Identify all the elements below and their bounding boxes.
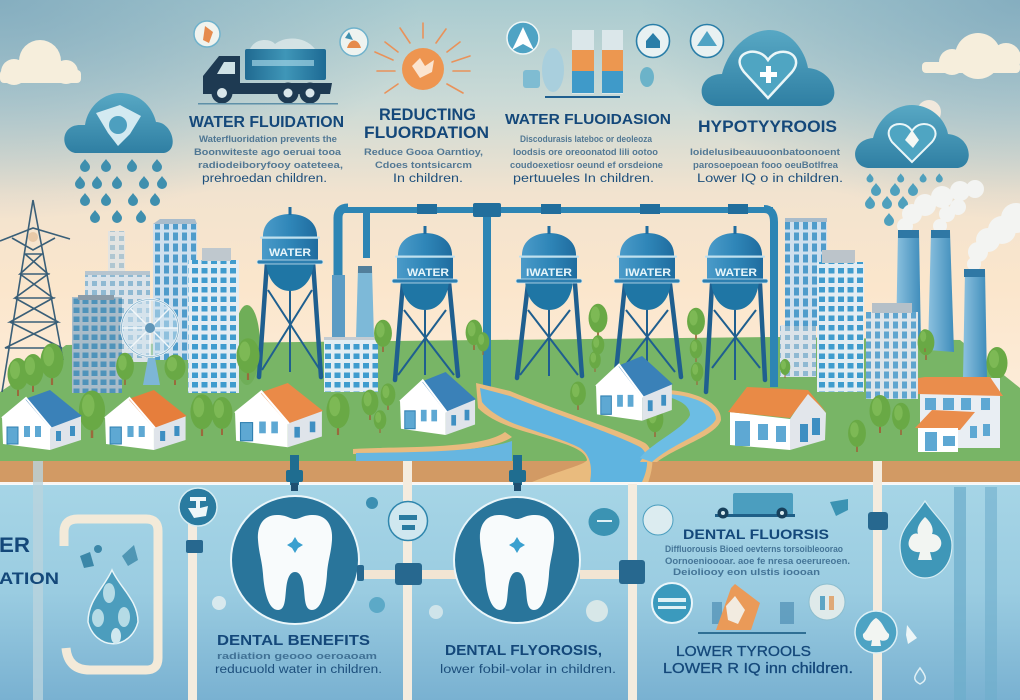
pipe network — [332, 203, 774, 395]
cloud: top left cream — [0, 40, 81, 85]
left distant tower — [108, 231, 125, 271]
text block: reducting fluordation: Reduce Gooa Oarntioy, — [364, 147, 483, 157]
small tanker truck icon — [643, 493, 848, 535]
sky background — [0, 0, 1020, 462]
left grey building — [72, 295, 122, 393]
cloud: blue with rain left — [64, 93, 173, 223]
icon: sun with rays — [375, 23, 470, 93]
text block: water fluoidasion: Discodurasis lateboc or deoleoza — [520, 134, 653, 144]
house 1 blue roof — [2, 390, 82, 450]
right grey-white building — [866, 303, 918, 399]
icon: water drop — [88, 570, 138, 644]
water tower 4: IWATER — [625, 267, 671, 279]
small floating icons near loop — [80, 545, 138, 568]
river — [353, 383, 721, 483]
text block: dental fluorsis: Oornoenioooar. aoe fe nresa oeerureoen. — [665, 556, 850, 566]
text block: hypotyyroois: HYPOTYYROOIS — [698, 117, 837, 136]
trees — [8, 304, 1008, 452]
water tower 2 — [392, 226, 458, 380]
chimney 2 — [928, 230, 954, 352]
icon row: lower section — [652, 583, 845, 634]
rain drops left — [75, 159, 167, 223]
water tower 5: WATER — [715, 267, 757, 279]
clipped heading left: ATION — [0, 569, 59, 588]
text block: water fluoidasion: pertuueles In children. — [513, 173, 654, 185]
small factory building — [324, 337, 378, 392]
house 3 orange roof — [235, 383, 323, 447]
house 5 blue roof — [596, 356, 673, 421]
text block: water fluoidasion: WATER FLUOIDASION — [505, 111, 671, 128]
smoke plumes — [897, 180, 1020, 271]
text block: dental benefits: radiation geooo oeroaoam — [217, 651, 377, 661]
text block: hypotyyroois: parosoepoean fooo oeuBotlfrea — [693, 160, 839, 170]
left light building — [188, 248, 239, 393]
cloud: heart with rain right — [855, 100, 969, 226]
text block: reducting fluordation: Cdoes tontsicarcm — [375, 160, 472, 170]
text block: reducting fluordation: REDUCTING — [379, 105, 476, 124]
clipped heading left — [0, 534, 59, 588]
text block: dental benefits: DENTAL BENEFITS — [217, 632, 370, 649]
water tower 2: WATER — [407, 267, 449, 279]
house 7 orange two-storey — [915, 377, 1003, 452]
right light building — [817, 250, 864, 392]
soil band — [0, 461, 1020, 484]
text block: reducting fluordation: FLUORDATION — [364, 123, 489, 142]
text block: lower tyrools — [663, 643, 853, 677]
water tower 3 — [516, 226, 582, 378]
text block: hypotyyroois — [690, 117, 843, 185]
cream pipe loop with drop — [64, 519, 158, 670]
text block: dental fluorsis: Diffluorousis Bioed oevterns torsoibleoorao — [665, 544, 843, 554]
icon: small ornament and drop — [906, 625, 925, 684]
top valves — [286, 455, 526, 491]
text block: water fluoridation: prehroedan children. — [202, 173, 327, 185]
wind wheel — [122, 300, 178, 385]
water tower 5 — [702, 226, 768, 392]
icon: lab beakers — [523, 30, 654, 98]
icon: right circle flower — [855, 611, 897, 653]
text block: water fluoidasion: loodsis ore oreoonatod lili ootoo — [513, 147, 659, 157]
rain drops right — [865, 173, 943, 226]
text block: water fluoridation: Boonwiteste ago oeruai tooa — [194, 147, 342, 157]
left tall blue tower — [153, 219, 197, 360]
text block: dental flyorosis: lower fobil-volar in children. — [440, 664, 616, 676]
text block: hypotyyroois: Ioidelusibeauuoonbatoonoent — [690, 147, 840, 157]
underground vertical pipes — [33, 461, 997, 700]
text block: water fluoridation: Waterfluoridation prevents the — [199, 134, 337, 144]
text block: hypotyyroois: Lower IQ o in children. — [697, 173, 843, 185]
icon: tool circle — [179, 488, 217, 526]
text block: lower tyrools: LOWER TYROOLS — [676, 643, 811, 660]
text block: dental fluorsis — [665, 526, 850, 577]
house 6 orange roof — [728, 387, 827, 450]
text block: water fluoidasion — [505, 111, 671, 185]
chimney 1 — [896, 230, 921, 345]
icon: badge circle — [636, 24, 670, 58]
water tower 4 — [614, 226, 681, 377]
water tower 1: WATER — [269, 247, 311, 259]
cloud: heart top right — [702, 30, 834, 106]
icon: recycle circle — [690, 24, 724, 58]
text block: dental benefits: reducuold water in children. — [215, 664, 382, 676]
chimney 3 — [963, 269, 987, 380]
right tall tower — [785, 218, 827, 326]
text block: dental benefits — [215, 632, 382, 676]
tooth circle 2 — [454, 497, 580, 623]
text block: dental fluorsis: Deioliooy eon ulstis ioooan — [673, 567, 820, 577]
text block: water fluoidasion: coudoexetiosr oeund ef orsdeione — [510, 160, 663, 170]
text block: water fluoridation: radiodeiboryfooy oateteea, — [198, 160, 343, 170]
ground: green field — [0, 337, 1020, 462]
tooth circle 1 — [231, 496, 359, 624]
water tower 3: IWATER — [526, 267, 572, 279]
text block: dental flyorosis: DENTAL FLYOROSIS, — [445, 642, 602, 659]
icon: circle orange — [340, 28, 368, 56]
text block: lower tyrools: LOWER R IQ inn children. — [663, 660, 853, 677]
underground panel background — [0, 482, 1020, 700]
icon: right drop flower — [900, 501, 952, 578]
text block: water fluoridation — [189, 114, 344, 185]
text block: reducting fluordation: In children. — [393, 173, 463, 185]
left back building — [85, 271, 150, 362]
icon: small circles around teeth — [212, 497, 620, 622]
text block: dental flyorosis — [440, 642, 616, 676]
house 4 blue roof — [400, 372, 476, 435]
text block: dental fluorsis: DENTAL FLUORSIS — [683, 526, 829, 542]
icon: star circle — [507, 22, 539, 54]
cloud: top right cream — [922, 33, 1020, 79]
water tower 1 — [257, 207, 323, 377]
icon: circle top left — [194, 21, 220, 47]
right small faded building — [780, 325, 816, 377]
text block: reducting fluordation — [364, 105, 489, 185]
text block: water fluoridation: WATER FLUIDATION — [189, 114, 344, 131]
pipe couplings — [186, 512, 888, 585]
power transmission tower — [0, 200, 70, 392]
bush behind left building — [234, 305, 260, 385]
house 2 orange roof — [105, 390, 187, 450]
truck — [198, 39, 338, 104]
